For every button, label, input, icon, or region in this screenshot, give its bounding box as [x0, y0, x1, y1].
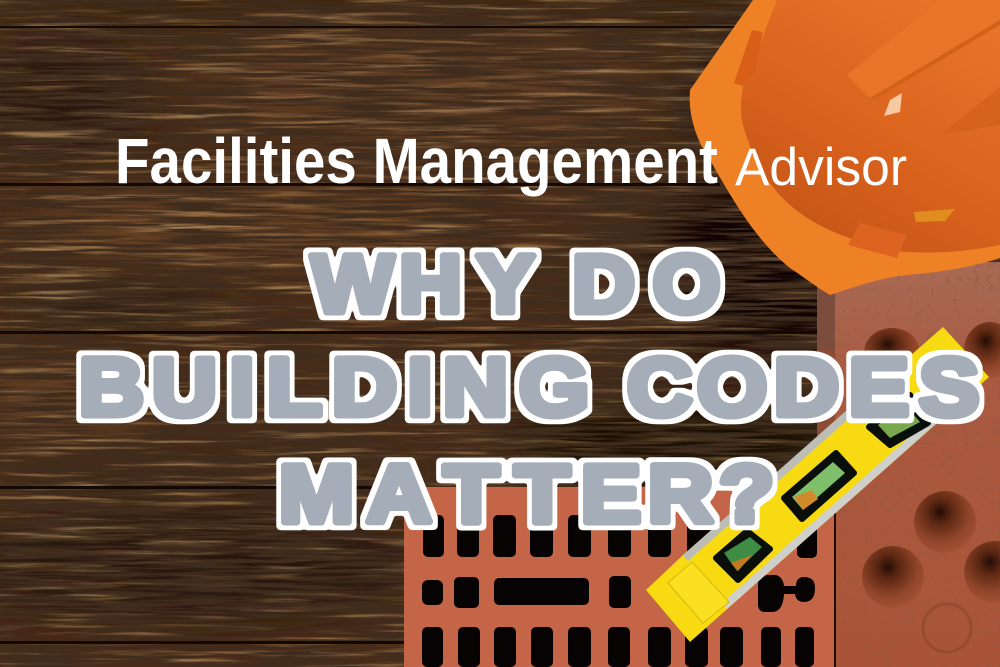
headline: WHY DO: [312, 238, 720, 329]
spirit level: [646, 327, 989, 642]
lower silver strip: [722, 417, 937, 609]
hat brim: [690, 0, 1000, 295]
vial 3: [869, 395, 928, 445]
right clay brick: [817, 262, 1000, 667]
left tab: [734, 30, 763, 86]
bottom tab: [848, 223, 907, 258]
headline: MATTER?: [279, 449, 774, 540]
publisher logo: Advisor: [735, 138, 907, 197]
top rib: [847, 0, 1000, 98]
rib highlight: [884, 93, 902, 116]
upper silver strip: [683, 371, 896, 561]
front brick with slots: [404, 487, 836, 667]
rib shadow: [870, 20, 1000, 100]
brick holes: [862, 322, 1000, 652]
vial 1: [716, 531, 770, 580]
headline: [79, 238, 979, 540]
yellow reflection: [914, 209, 955, 222]
vial 2: [784, 453, 854, 519]
publisher logo: Facilities Management: [115, 125, 718, 197]
crown ridge: [940, 87, 1000, 135]
hat crown: [741, 0, 1000, 253]
end cap panel: [668, 562, 729, 623]
orange hard hat: [690, 0, 1000, 295]
headline: BUILDING CODES: [79, 342, 979, 433]
